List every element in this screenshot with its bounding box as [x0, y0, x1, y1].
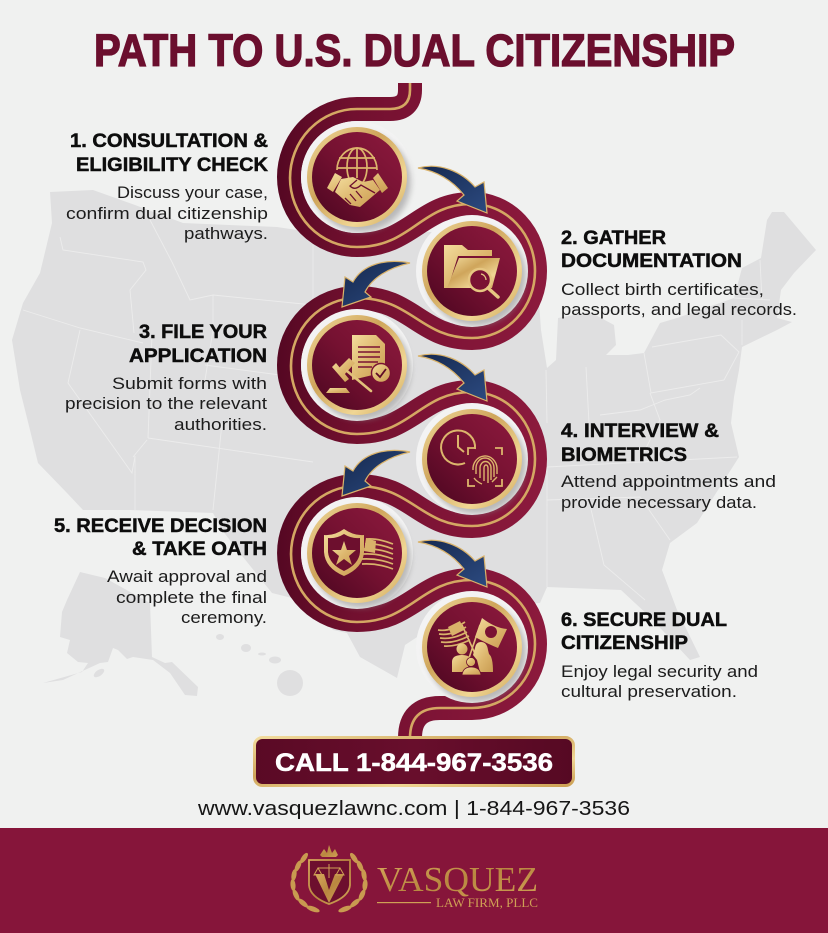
logo: Vasquez Law Firm [290, 845, 538, 914]
arrow: step 5 to 6 [418, 540, 487, 587]
arrow: step 1 to 2 [418, 166, 487, 213]
text: step 1: ELIGIBILITY CHECK [76, 154, 268, 176]
text: step 6 [561, 609, 758, 701]
text: step 5: Await approval and [107, 568, 267, 586]
text: step 3: 3. FILE YOUR [139, 321, 267, 343]
text: step 6: 6. SECURE DUAL [561, 609, 727, 631]
text: step 6: Enjoy legal security and [561, 663, 758, 681]
step 3 medallion [301, 309, 413, 421]
text: step 5: 5. RECEIVE DECISION [54, 515, 267, 537]
text: step 3: APPLICATION [129, 345, 267, 367]
arrow: step 2 to 3 [342, 261, 410, 307]
logo text: law firm: LAW FIRM, PLLC [436, 895, 538, 910]
icon: globe and handshake [327, 148, 388, 207]
text: step 1: confirm dual citizenship [66, 205, 268, 223]
text: step 4: provide necessary data. [561, 494, 757, 512]
text: step 5: & TAKE OATH [132, 538, 267, 560]
step 2 medallion [416, 215, 528, 327]
text: step 3: authorities. [174, 416, 267, 434]
text: step 1: pathways. [184, 225, 268, 243]
text: step 4: 4. INTERVIEW & [561, 420, 719, 442]
logo text: firm name: VASQUEZ [377, 860, 538, 899]
arrow: step 3 to 4 [418, 354, 487, 401]
title: PATH TO U.S. DUAL CITIZENSHIP [94, 25, 735, 76]
serpentine ribbon path [289, 83, 535, 738]
map: Hawaii [92, 634, 303, 696]
text: step 5: ceremony. [181, 609, 267, 627]
map: United States silhouette [12, 190, 816, 696]
logo icon: shield [309, 860, 350, 904]
call to action button: CALL 1-844-967-3536 [275, 749, 553, 777]
text: step 2: passports, and legal records. [561, 301, 797, 319]
call to action button [254, 738, 574, 786]
text: step 4: BIOMETRICS [561, 444, 687, 466]
logo rule [377, 902, 431, 903]
text: step 4: Attend appointments and [561, 473, 776, 491]
logo icon: laurel wreath [290, 852, 368, 914]
text: step 5: complete the final [116, 589, 267, 607]
website and phone line: www.vasquezlawnc.com | 1-844-967-3536 [197, 797, 630, 820]
step 1 medallion [301, 121, 413, 233]
arrow: step 4 to 5 [342, 450, 410, 496]
text: step 2 [561, 227, 797, 319]
footer band [0, 828, 828, 933]
step 6 medallion [416, 591, 528, 703]
text: step 2: DOCUMENTATION [561, 250, 742, 272]
text: step 1: Discuss your case, [117, 184, 268, 202]
text: step 2: 2. GATHER [561, 227, 666, 249]
icon: folder and magnifier [444, 245, 500, 297]
icon: crossed flags and family [438, 618, 507, 675]
text: step 1: 1. CONSULTATION & [70, 130, 268, 152]
icon: clock and fingerprint [441, 430, 502, 486]
text: step 4 [561, 420, 776, 512]
text: step 6: cultural preservation. [561, 683, 737, 701]
text: step 2: Collect birth certificates, [561, 281, 764, 299]
text: step 3 [65, 321, 267, 434]
step 5 medallion [301, 497, 413, 609]
icon: gavel, document and check [326, 335, 390, 393]
text: step 3: Submit forms with [112, 375, 267, 393]
map: state lines [23, 220, 770, 600]
logo icon: crown [320, 845, 338, 857]
text: step 1 [66, 130, 268, 243]
map: Alaska [43, 572, 198, 696]
text: step 5 [54, 515, 267, 627]
step 4 medallion [416, 403, 528, 515]
text: step 6: CITIZENSHIP [561, 632, 688, 654]
icon: shield and flag [324, 529, 393, 576]
text: step 3: precision to the relevant [65, 395, 267, 413]
